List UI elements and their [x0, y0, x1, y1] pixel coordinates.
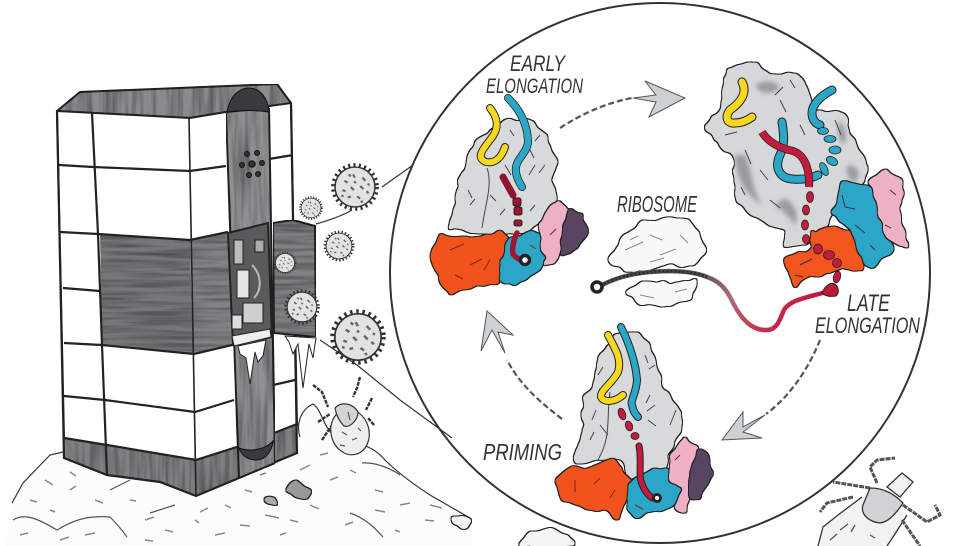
late elongation ribosome: [703, 63, 907, 288]
base band: [64, 424, 297, 496]
dark side panel: [190, 232, 233, 354]
rock fragments bottom: [450, 516, 574, 546]
virus: on door small: [275, 253, 295, 273]
chain end bead: [592, 282, 602, 292]
pillar: [226, 108, 275, 478]
label: late elongation: [815, 290, 920, 338]
tower grid lines: [57, 103, 297, 496]
icicles: [238, 336, 316, 388]
polypeptide chain: [600, 271, 826, 330]
open compartment with circuitry: [228, 223, 272, 346]
virus: large upper: [333, 165, 377, 209]
chain head blob: [822, 283, 838, 296]
tower top face: [57, 84, 291, 118]
mite on mound: [313, 377, 374, 459]
label: early elongation: EARLY: [510, 51, 566, 76]
ribosome small subunit: [623, 280, 698, 307]
connector lines to magnified circle: [316, 165, 452, 438]
central ribosome with nascent chain: [592, 218, 838, 330]
label: early elongation: [486, 51, 584, 98]
label: priming: PRIMING: [483, 439, 562, 465]
dark front panel: [100, 234, 193, 354]
priming ribosome: [555, 327, 713, 520]
label: ribosome: RIBOSOME: [617, 191, 697, 217]
virus: middle: [325, 232, 353, 260]
cycle arrow: priming to early: [481, 311, 562, 419]
vending machine tower: [57, 84, 316, 496]
ribosome large subunit: [608, 218, 707, 272]
tick bottom right: [818, 458, 940, 546]
ground mound: [5, 404, 472, 546]
virus: large lower: [333, 312, 383, 362]
virus: on door large: [286, 291, 318, 323]
speaker holes: [240, 150, 264, 178]
tower white faces: [57, 103, 297, 460]
early elongation ribosome: [432, 98, 587, 295]
virus: small upper: [300, 197, 322, 219]
label: early elongation: ELONGATION: [486, 75, 584, 98]
cycle arrow: late to priming: [722, 340, 820, 440]
cycle arrow: early to late: [560, 81, 685, 128]
pillar top dome: [227, 88, 269, 112]
label: late elongation: LATE: [847, 290, 891, 317]
label: late elongation: ELONGATION: [815, 313, 920, 338]
pillar bottom dome: [239, 441, 273, 460]
magnifying circle: [390, 3, 930, 543]
open door: [273, 220, 316, 337]
